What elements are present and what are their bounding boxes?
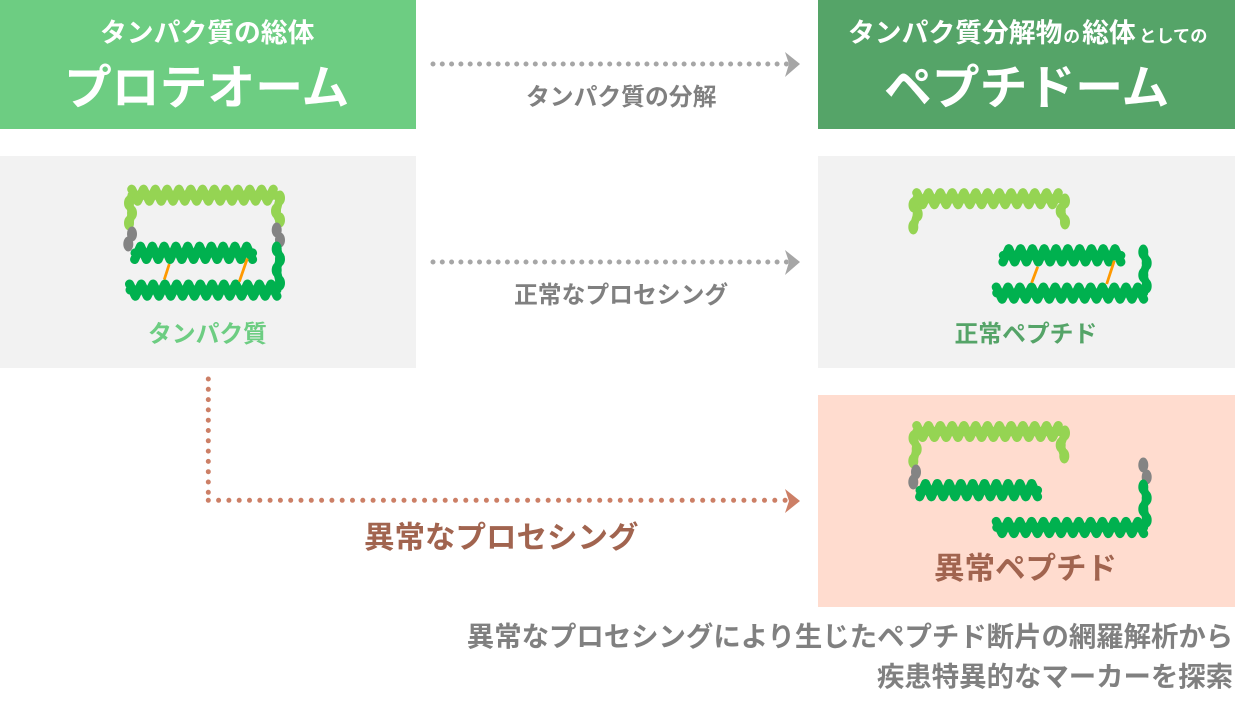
arrow: abnormal processing bbox=[208, 379, 800, 513]
label: normal peptide: 正常ペプチド bbox=[954, 321, 1097, 348]
panel: abnormal peptide bbox=[818, 395, 1235, 607]
label: normal processing: 正常なプロセシング bbox=[514, 281, 728, 309]
normal peptide diagram bbox=[908, 193, 1152, 299]
arrow: normal processing bbox=[433, 250, 800, 275]
header: proteome bbox=[0, 0, 416, 129]
panel: protein bbox=[0, 156, 416, 368]
label: abnormal processing: 異常なプロセシング bbox=[364, 521, 638, 555]
protein diagram bbox=[123, 189, 285, 296]
caption bbox=[467, 621, 1233, 692]
arrow: protein degradation bbox=[433, 52, 800, 77]
caption: 異常なプロセシングにより生じたペプチド断片の網羅解析から bbox=[467, 621, 1233, 652]
label: abnormal peptide: 異常ペプチド bbox=[934, 552, 1117, 586]
panel: normal peptide bbox=[818, 156, 1235, 368]
header: peptidome bbox=[818, 0, 1235, 129]
header title: proteome: プロテオーム bbox=[64, 62, 349, 116]
label: protein degradation: タンパク質の分解 bbox=[526, 84, 717, 111]
header title: peptidome: ペプチドーム bbox=[884, 62, 1169, 116]
label: protein: タンパク質 bbox=[148, 321, 267, 348]
abnormal peptide diagram bbox=[908, 426, 1152, 534]
header subtitle: peptidome: タンパク質分解物の総体としての bbox=[848, 18, 1207, 48]
header subtitle: proteome: タンパク質の総体 bbox=[100, 18, 315, 48]
caption: 疾患特異的なマーカーを探索 bbox=[877, 661, 1233, 692]
